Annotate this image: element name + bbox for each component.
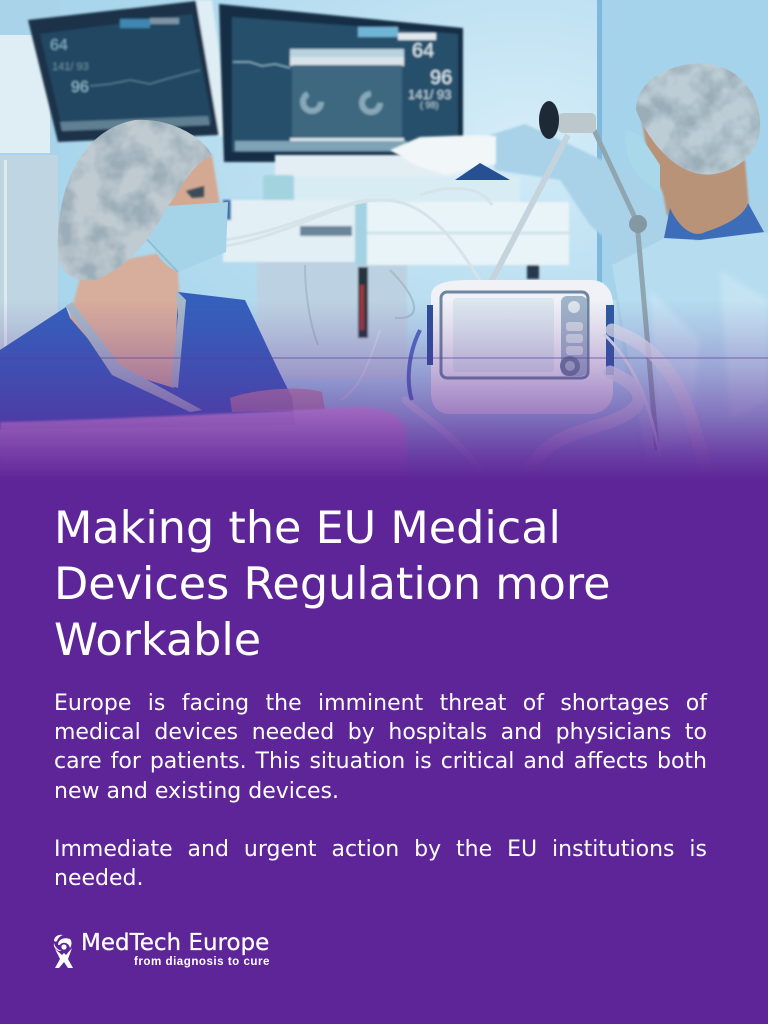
body text: Immediate and urgent action by the EU institutions is — [54, 837, 707, 862]
female clinician in scrubs — [0, 120, 325, 430]
title: Making the EU Medical — [54, 503, 561, 554]
title: Workable — [54, 615, 261, 666]
hero photo: medical staff with monitors and ventilator — [0, 0, 768, 473]
body text: care for patients. This situation is critical and affects both — [54, 749, 707, 774]
main patient monitor — [219, 4, 463, 162]
lilac foreground band — [0, 407, 408, 480]
left patient monitor — [28, 0, 230, 142]
cables — [225, 188, 492, 400]
body text — [54, 691, 708, 891]
main patient monitor: ( 98) — [420, 100, 439, 110]
breathing hoses — [405, 330, 705, 470]
title: Devices Regulation more — [54, 559, 611, 610]
left patient monitor: 96 — [71, 79, 89, 96]
main patient monitor: 141/ 93 — [408, 87, 451, 102]
ventilator stand arm — [466, 101, 657, 450]
left patient monitor: 64 — [50, 37, 68, 54]
body text: needed. — [54, 866, 143, 891]
body text: medical devices needed by hospitals and physicians to — [54, 720, 707, 745]
main patient monitor: 96 — [430, 67, 452, 89]
wall background — [0, 0, 768, 480]
ventilator device — [427, 280, 614, 414]
logo: MedTech Europe: MedTech Europe — [81, 930, 269, 956]
body text: new and existing devices. — [54, 779, 339, 804]
logo: MedTech Europe — [54, 930, 270, 968]
logo: MedTech Europe: from diagnosis to cure — [134, 955, 270, 968]
body text: Europe is facing the imminent threat of shortages of — [54, 691, 707, 716]
title — [54, 503, 611, 666]
main patient monitor: 64 — [412, 40, 434, 62]
equipment shelf and drawers — [223, 155, 569, 378]
left patient monitor: 141/ 93 — [52, 61, 89, 73]
male clinician in gown — [390, 63, 768, 480]
purple gradient overlay — [0, 300, 768, 480]
